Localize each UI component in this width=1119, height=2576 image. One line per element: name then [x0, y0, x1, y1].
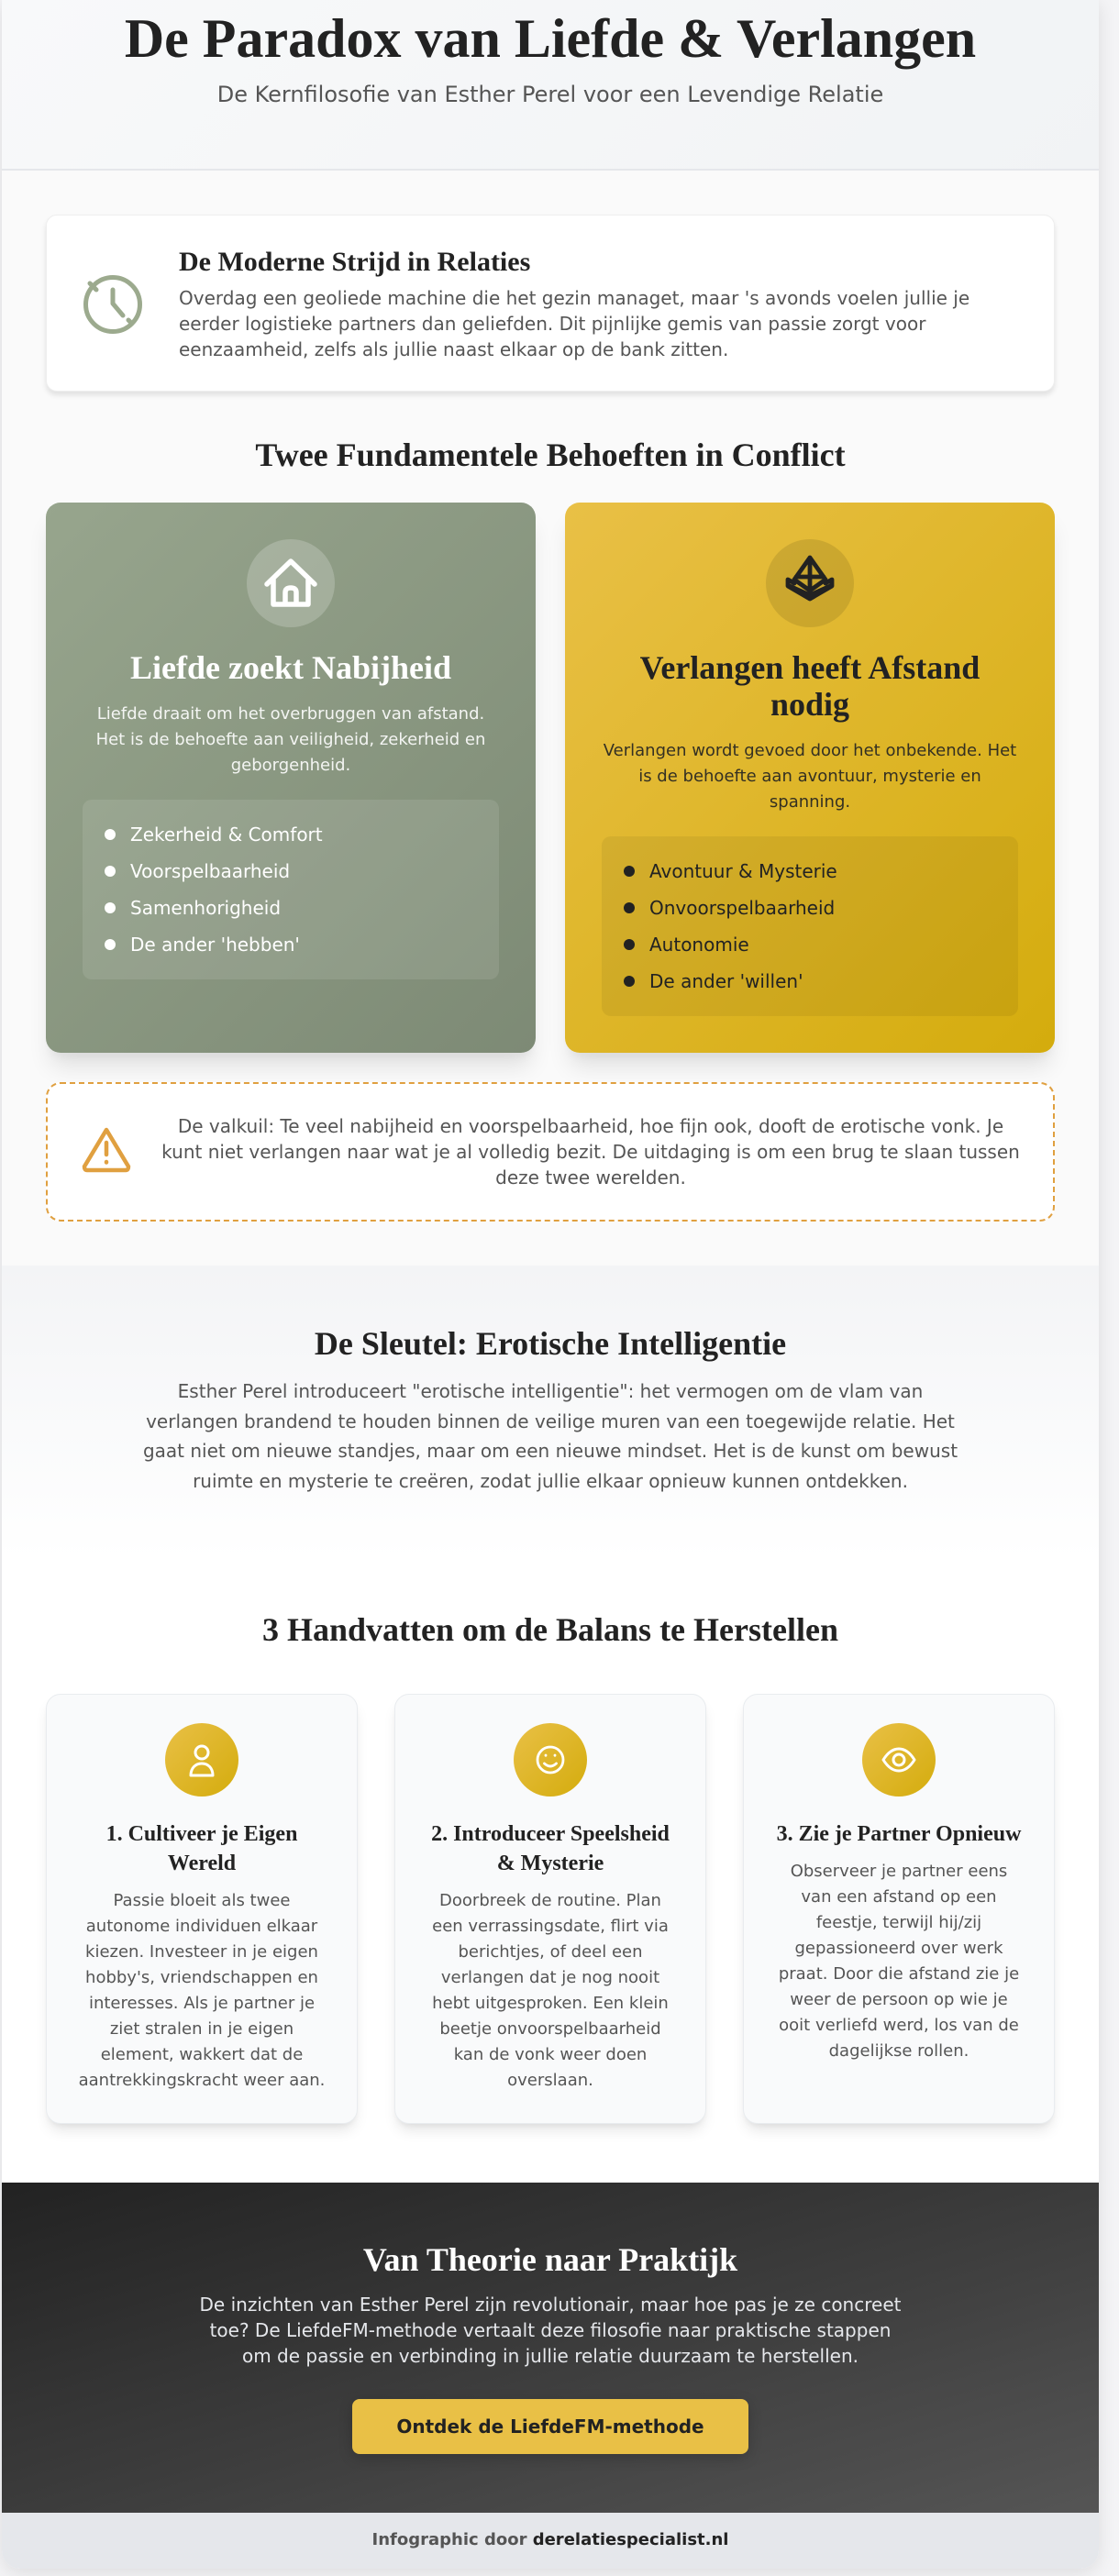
paragraph: Overdag een geoliede machine die het gezin managet, maar 's avonds voelen jullie je: [179, 287, 969, 309]
list item: De ander 'hebben': [130, 934, 300, 956]
callout: pitfall: [46, 1082, 1055, 1222]
paragraph: om de passie en verbinding in jullie relatie duurzaam te herstellen.: [242, 2345, 859, 2367]
panel: love seeks closeness: [46, 503, 536, 1053]
button: [352, 2399, 748, 2454]
text: kan de vonk weer doen: [454, 2045, 647, 2064]
heading: 1. Cultiveer je Eigen: [106, 1822, 297, 1846]
icon: smile: [514, 1723, 587, 1797]
text: ziet stralen in je eigen: [110, 2019, 294, 2039]
heading: Verlangen heeft Afstand: [640, 649, 980, 686]
text: feestje, terwijl hij/zij: [816, 1913, 981, 1932]
description: [604, 741, 1016, 812]
icon: ship: [766, 539, 854, 627]
text: interesses. Als je partner je: [89, 1994, 315, 2013]
pitfall text: kunt niet verlangen naar wat je al volledig bezit. De uitdaging is om een brug te slaan tussen: [161, 1141, 1020, 1163]
panel: desire needs distance: [565, 503, 1055, 1053]
heading: [640, 649, 980, 723]
text: verlangen dat je nog nooit: [441, 1968, 659, 1987]
heading: & Mysterie: [497, 1852, 604, 1875]
text: gepassioneerd over werk: [794, 1939, 1003, 1958]
section heading: needs: Twee Fundamentele Behoeften in Conflict: [255, 437, 846, 473]
heading: Van Theorie naar Praktijk: [363, 2241, 737, 2278]
text: kiezen. Investeer in je eigen: [85, 1942, 318, 1962]
icon: eye: [862, 1723, 936, 1797]
text: praat. Door die afstand zie je: [779, 1964, 1019, 1984]
list item: De ander 'willen': [649, 970, 803, 992]
card: step 2: [394, 1694, 706, 2124]
heading: 2. Introduceer Speelsheid: [431, 1822, 670, 1846]
icon: person: [165, 1723, 238, 1797]
description: [96, 704, 485, 775]
text: Observeer je partner eens: [791, 1862, 1007, 1881]
icon: house: [247, 539, 335, 627]
text: hobby's, vriendschappen en: [85, 1968, 318, 1987]
heading: De Moderne Strijd in Relaties: [179, 247, 530, 277]
list box: [602, 836, 1018, 1016]
paragraph: verlangen brandend te houden binnen de veilige muren van een toegewijde relatie. Het: [146, 1410, 955, 1432]
description: Verlangen wordt gevoed door het onbekende. Het: [604, 741, 1016, 760]
list box: [83, 800, 499, 979]
pitfall text: deze twee werelden.: [495, 1166, 686, 1188]
text: berichtjes, of deel een: [458, 1942, 643, 1962]
paragraph: [179, 287, 969, 360]
paragraph: gaat niet om nieuwe standjes, maar om een nieuwe mindset. Het is de kunst om bewust: [143, 1440, 958, 1462]
panel: modern struggle: [46, 215, 1055, 392]
description: is de behoefte aan avontuur, mysterie en: [638, 767, 981, 786]
text: ooit verliefd werd, los van de: [779, 2016, 1019, 2035]
text: overslaan.: [507, 2071, 593, 2090]
text: weer de persoon op wie je: [790, 1990, 1008, 2009]
footer: [0, 2513, 1101, 2569]
text: aantrekkingskracht weer aan.: [79, 2071, 325, 2090]
icon: warning triangle: [83, 1128, 130, 1172]
text: [79, 1891, 325, 2090]
paragraph: [200, 2294, 901, 2367]
paragraph: toe? De LiefdeFM-methode vertaalt deze filosofie naar praktische stappen: [210, 2319, 891, 2341]
paragraph: Esther Perel introduceert "erotische intelligentie": het vermogen om de vlam van: [178, 1380, 923, 1402]
heading: [106, 1822, 297, 1875]
description: geborgenheid.: [231, 756, 350, 775]
text: hebt uitgesproken. Een klein: [432, 1994, 669, 2013]
list item: Zekerheid & Comfort: [130, 824, 323, 846]
main light background: [0, 171, 1101, 1266]
text: [432, 1891, 669, 2090]
heading: 3. Zie je Partner Opnieuw: [777, 1822, 1021, 1846]
text: element, wakkert dat de: [101, 2045, 303, 2064]
pitfall text: [161, 1115, 1020, 1188]
heading: Wereld: [168, 1852, 236, 1875]
pitfall text: De valkuil: Te veel nabijheid en voorspelbaarheid, hoe fijn ook, dooft de erotische vonk. Je: [178, 1115, 1003, 1137]
section: erotic intelligence: [0, 1266, 1101, 1559]
text: [779, 1862, 1019, 2061]
heading: De Sleutel: Erotische Intelligentie: [315, 1325, 786, 1362]
description: Het is de behoefte aan veiligheid, zekerheid en: [96, 730, 485, 749]
text: autonome individuen elkaar: [86, 1917, 317, 1936]
text: beetje onvoorspelbaarheid: [439, 2019, 661, 2039]
icon: clock: [83, 275, 142, 334]
header band: [0, 0, 1101, 171]
description: Liefde draait om het overbruggen van afstand.: [97, 704, 484, 724]
text: een verrassingsdate, flirt via: [432, 1917, 669, 1936]
subtitle: De Kernfilosofie van Esther Perel voor een Levendige Relatie: [217, 82, 883, 107]
heading: Liefde zoekt Nabijheid: [130, 649, 451, 686]
heading: nodig: [770, 686, 849, 723]
list item: Voorspelbaarheid: [130, 860, 290, 882]
list item: Avontuur & Mysterie: [649, 860, 837, 882]
title: De Paradox van Liefde & Verlangen: [125, 8, 976, 69]
description: spanning.: [770, 792, 850, 812]
card: step 1: [46, 1694, 358, 2124]
card: step 3: [743, 1694, 1055, 2124]
paragraph: [143, 1380, 958, 1492]
text: Passie bloeit als twee: [114, 1891, 290, 1910]
paragraph: ruimte en mysterie te creëren, zodat jullie elkaar opnieuw kunnen ontdekken.: [193, 1470, 908, 1492]
section heading: handles: 3 Handvatten om de Balans te Herstellen: [262, 1611, 838, 1648]
heading: [431, 1822, 670, 1875]
paragraph: De inzichten van Esther Perel zijn revolutionair, maar hoe pas je ze concreet: [200, 2294, 901, 2316]
list item: Samenhorigheid: [130, 897, 281, 919]
paragraph: eenzaamheid, zelfs als jullie naast elkaar op de bank zitten.: [179, 338, 728, 360]
credit text: Infographic door derelatiespecialist.nl: [372, 2530, 728, 2549]
text: dagelijkse rollen.: [829, 2041, 969, 2061]
button: Ontdek de LiefdeFM-methode: [396, 2416, 704, 2438]
list item: Onvoorspelbaarheid: [649, 897, 835, 919]
panel: call to action: [0, 2183, 1101, 2513]
text: Doorbreek de routine. Plan: [439, 1891, 661, 1910]
text: van een afstand op een: [801, 1887, 997, 1907]
list item: Autonomie: [649, 934, 749, 956]
paragraph: eerder logistieke partners dan geliefden. Dit pijnlijke gemis van passie zorgt voor: [179, 313, 925, 335]
